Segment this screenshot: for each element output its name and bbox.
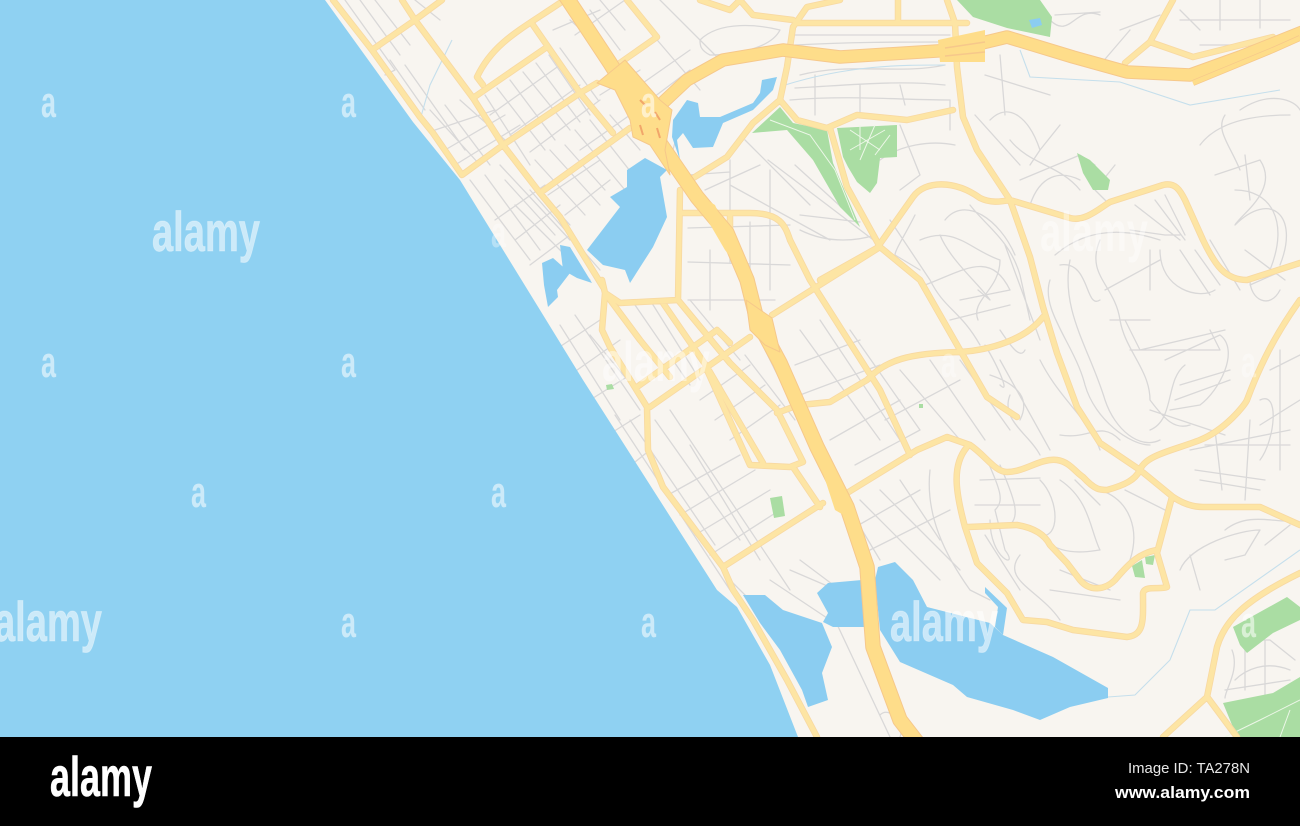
watermark: alamy logos [0,200,1148,653]
watermark: alamy logos: alamy [602,330,710,393]
pond [1029,18,1042,28]
lake: upper [672,77,777,160]
arterial casing [333,0,1300,737]
interchange: centre [746,300,780,352]
ocean [0,0,798,737]
park: south-east bottom [1223,677,1300,737]
minor street network [345,0,1300,737]
freeway casing [655,31,1300,110]
watermark: small marks: a [491,468,506,517]
footer logo: alamy [50,745,152,808]
watermark: small marks: a [941,338,956,387]
arterial roads [333,0,1300,737]
watermark: small marks: a [191,468,206,517]
lake: central [587,158,667,283]
park: canyon [752,107,860,227]
parks [606,0,1300,737]
freeway widening [690,190,745,275]
interchange: I-5 / 78 [597,60,672,175]
watermark: small marks: a [491,208,506,257]
watermark: alamy logos: alamy [890,590,998,653]
image id: Image ID: TA278N [1128,760,1250,777]
arterial fill [333,0,1300,737]
freeways [565,0,1300,742]
lake: lagoon right [560,245,592,283]
interchange markers [640,100,660,138]
watermark: small marks: a [641,78,656,127]
park: small east [1077,153,1110,190]
interchange: 78 east [938,30,985,62]
lakes [542,77,1108,720]
lake: south big [875,562,1108,720]
watermark: small marks: a [1241,338,1256,387]
lake: thin arm [985,587,1007,635]
ramp: east split [1193,38,1300,83]
watermark: small marks: a [41,338,56,387]
creek lines [420,40,1300,697]
watermark: small marks: a [41,78,56,127]
watermark: small marks: a [1241,598,1256,647]
watermark: small marks [41,78,1256,647]
interchange: south [822,470,852,520]
website: www.alamy.com [1114,783,1250,802]
park: central reserve [837,125,897,193]
park trails [770,120,1300,737]
footer bar [0,737,1300,826]
park: pocket [770,496,785,518]
watermark: small marks: a [341,598,356,647]
watermark: small marks: a [641,598,656,647]
freeway fill [655,31,1300,110]
lake: south-west lagoon [743,595,832,707]
lake: lagoon left [542,258,570,307]
watermark: small marks: a [341,338,356,387]
lake: south small [817,580,864,627]
watermark: small marks: a [341,78,356,127]
park: south-east top [1233,597,1300,653]
watermark: alamy logos: alamy [1040,200,1148,263]
watermark: alamy logos: alamy [152,200,260,263]
park: north green area [957,0,1052,37]
